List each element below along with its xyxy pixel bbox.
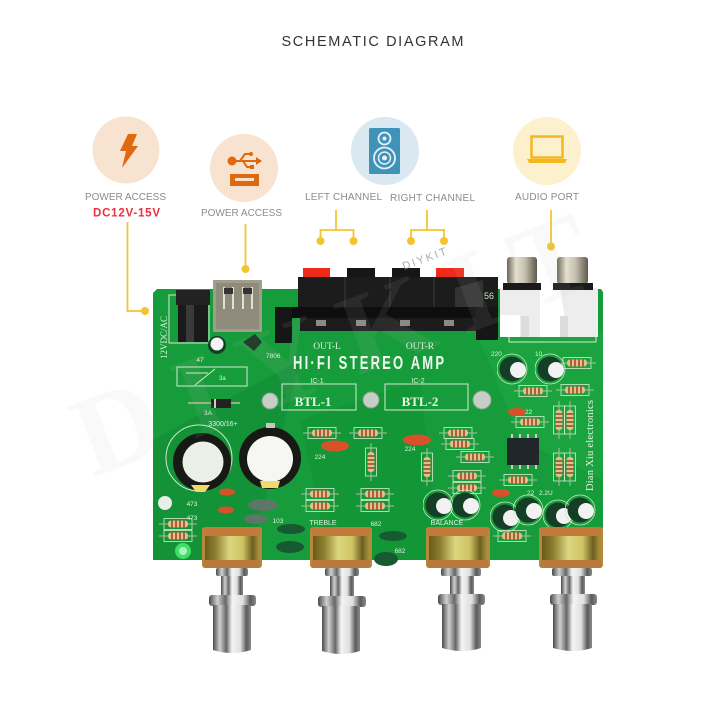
resistors [159,358,596,542]
BTL outlines [177,367,468,410]
potentiometer 3 [426,527,490,651]
potentiometer 1 [202,527,262,653]
board markings: BALANCE [431,520,464,527]
watermark: DIYKIT [55,187,610,501]
board markings: IC-2 [411,378,425,385]
board markings: 56 [484,291,494,301]
speaker terminals [275,268,498,343]
potentiometer 2 [310,527,372,654]
label: power access DC: DC12V-15V [93,208,160,220]
IC chip [507,434,539,469]
leader: right channel [407,210,448,245]
PCB [153,289,603,560]
board markings: TREBLE [309,520,337,527]
board markings: 7806 [266,353,281,360]
large capacitors [166,423,301,492]
BTL-2 label: BTL-2 [402,394,438,409]
board markings: 2.2U [539,490,553,497]
BTL-1 label: BTL-1 [295,394,331,409]
board markings: 47 [196,357,204,364]
potentiometer 4 [539,527,603,651]
board markings: IC-1 [310,378,324,385]
DC jack [169,290,210,343]
USB socket [213,280,262,332]
icon: laptop [513,117,581,185]
board markings: 3300/16+ [208,421,238,428]
board markings: Dian Xiu electronics [585,400,596,491]
board markings: 682 [395,548,406,555]
board markings: 22 [525,409,533,416]
board markings: 473 [187,501,198,508]
small parts near power [186,334,262,408]
board markings: 3A [204,410,213,417]
board markings: 12VDC/AC [159,316,169,359]
leader: audio port [547,210,555,250]
board markings: 473 [187,515,198,522]
board markings: OUT-R [406,342,435,352]
board markings: 224 [315,454,326,461]
board markings: 22 [527,490,535,497]
leader: USB [242,224,250,273]
board markings: HI·FI STEREO AMP [293,353,444,374]
mounting hole and LED [158,496,191,559]
leader: left channel [316,210,358,245]
label: left channel: LEFT CHANNEL [305,192,382,203]
watermark: DIYKIT [401,246,449,273]
label: power access DC: POWER ACCESS [85,192,166,203]
icon: speaker [351,117,419,185]
label: power access DC [85,192,166,220]
ceramic capacitors [218,408,526,514]
icon: USB [210,134,278,202]
film capacitors [244,499,407,566]
board markings: 10 [535,351,543,358]
RCA sockets [500,257,598,342]
board markings: 224 [405,446,416,453]
board markings: 682 [371,521,382,528]
label: power access USB: POWER ACCESS [201,208,282,219]
label: audio port: AUDIO PORT [515,192,579,203]
label: right channel: RIGHT CHANNEL [390,193,475,204]
title: SCHEMATIC DIAGRAM [282,34,464,50]
board markings: 3a [219,376,226,382]
small electrolytic capacitors [423,354,595,532]
leader: DC power [128,222,149,315]
icon: power lightning bolt [92,116,160,184]
board markings: 103 [273,518,284,525]
board markings: 220 [491,351,502,358]
board markings: OUT-L [313,342,341,352]
board markings [159,291,596,555]
screws [262,391,491,409]
circuit board [153,257,603,654]
